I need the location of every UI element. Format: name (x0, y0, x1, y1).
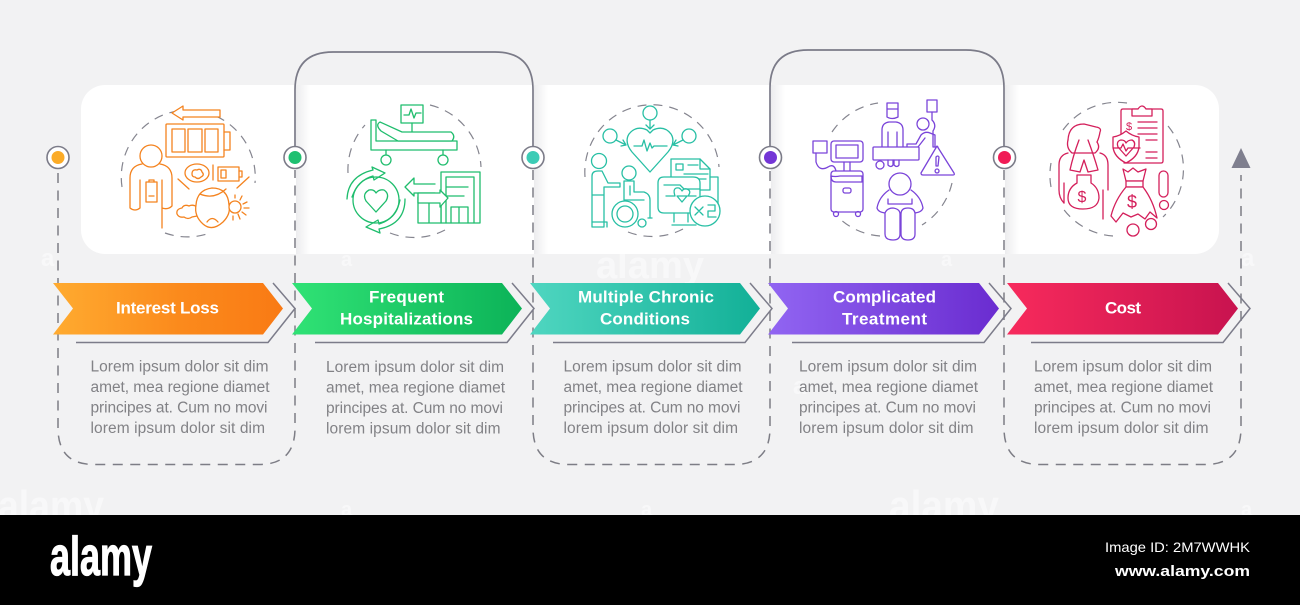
banner 2: Frequent (369, 288, 444, 306)
description 3 (564, 358, 743, 437)
banner 4: Treatment (842, 310, 927, 328)
description 2: lorem ipsum dolor sit dim (326, 420, 500, 438)
timeline dot 2 (284, 146, 306, 168)
watermark marks: a (341, 499, 353, 521)
banner 2: Hospitalizations (340, 310, 473, 328)
watermark marks: alamy (0, 482, 105, 529)
description 5: Lorem ipsum dolor sit dim (1034, 358, 1212, 376)
description 3: Lorem ipsum dolor sit dim (564, 358, 742, 376)
description 3: principes at. Cum no movi (564, 400, 740, 416)
image id: Image ID: 2M7WWHK (1105, 539, 1251, 555)
end arrowhead (1232, 148, 1250, 168)
description 1: Lorem ipsum dolor sit dim (90, 358, 268, 376)
description 1: amet, mea regione diamet (90, 379, 270, 396)
description 4: lorem ipsum dolor sit dim (799, 420, 974, 437)
step 5: cost (1007, 283, 1250, 437)
icon: cost: $ (1127, 192, 1137, 212)
timeline dot 5 (994, 146, 1016, 168)
footer logo: alamy (50, 525, 152, 587)
icon: frequent hospitalizations (347, 105, 481, 238)
description 4: amet, mea regione diamet (799, 379, 979, 396)
watermark marks (0, 245, 1255, 529)
description 2: Lorem ipsum dolor sit dim (326, 359, 504, 376)
watermark marks: alamy (596, 245, 704, 287)
banner 3 (530, 283, 772, 342)
description 1: lorem ipsum dolor sit dim (90, 420, 265, 437)
step 3: multiple chronic conditions (530, 283, 772, 437)
watermark marks: a (1241, 499, 1253, 521)
description 4 (799, 358, 979, 437)
watermark marks: a (793, 373, 807, 400)
timeline connector lines (58, 50, 1241, 464)
description 5: principes at. Cum no movi (1034, 400, 1211, 416)
watermark marks: a (41, 245, 55, 272)
timeline dot 4 (760, 146, 782, 168)
banner 4 (768, 283, 1011, 342)
icon: cost: $ (1078, 189, 1086, 206)
description 5 (1034, 358, 1214, 437)
description 3: lorem ipsum dolor sit dim (564, 420, 738, 437)
banner 5: Cost (1105, 298, 1141, 318)
description 4: Lorem ipsum dolor sit dim (799, 358, 977, 376)
icon: interest loss (121, 106, 255, 237)
step 4: complicated treatment (768, 283, 1011, 437)
website: www.alamy.com (1114, 563, 1250, 580)
watermark marks: alamy (889, 482, 1000, 529)
watermark marks: a (941, 249, 953, 271)
banner 4: Complicated (833, 288, 936, 306)
banner 1 (53, 283, 295, 342)
icon: complicated treatment (813, 100, 954, 240)
description 2: principes at. Cum no movi (326, 400, 503, 417)
description 1 (90, 358, 270, 437)
timeline dot 1 (47, 146, 69, 168)
footer bar (0, 515, 1300, 605)
step 2: frequent hospitalizations (292, 283, 534, 438)
banner 5 (1007, 283, 1250, 342)
timeline dot 3 (522, 146, 544, 168)
watermark marks: a (641, 499, 653, 521)
icon: cost (1050, 102, 1183, 236)
banner 1: Interest Loss (116, 298, 219, 318)
description 2 (326, 359, 506, 438)
step 1: interest loss (53, 283, 295, 437)
watermark marks: a (1241, 245, 1255, 272)
description 1: principes at. Cum no movi (90, 400, 268, 416)
description 5: amet, mea regione diamet (1034, 379, 1214, 396)
white icon card (81, 85, 1219, 254)
description 3: amet, mea regione diamet (564, 379, 743, 396)
icon: multiple chronic conditions (585, 105, 720, 237)
description 4: principes at. Cum no movi (799, 400, 976, 416)
banner 2 (292, 283, 534, 342)
icon: cost: $ (1126, 121, 1132, 133)
watermark marks: a (341, 249, 353, 271)
banner 3: Conditions (600, 310, 690, 328)
banner 3: Multiple Chronic (578, 288, 714, 306)
description 5: lorem ipsum dolor sit dim (1034, 420, 1208, 437)
description 2: amet, mea regione diamet (326, 380, 506, 396)
